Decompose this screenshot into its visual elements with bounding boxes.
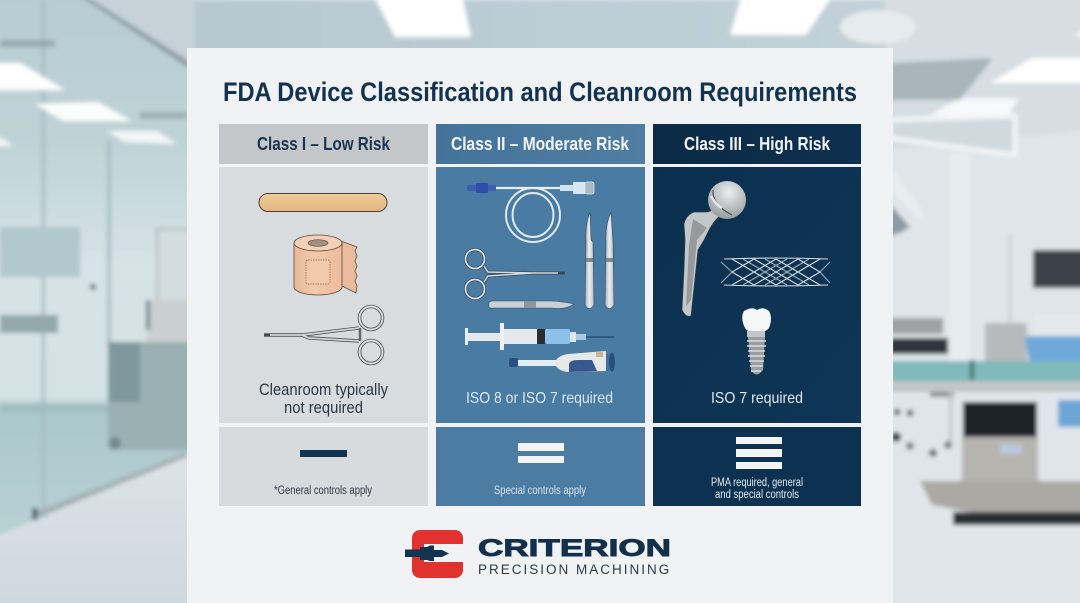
text: cleanroom status [259, 381, 389, 417]
icon: dental implant [742, 308, 771, 374]
text: cleanroom requirement: ISO 8 or ISO 7 required [466, 390, 613, 407]
glass wall [0, 0, 195, 540]
floor left [0, 454, 195, 603]
icon: syringe [465, 323, 614, 350]
icon: IV tubing [467, 182, 594, 242]
text: PMA note [711, 477, 803, 501]
panel: Class II devices [436, 167, 645, 423]
icon: tongue depressor [259, 194, 387, 212]
panel: Class III devices [653, 167, 861, 423]
header: Class II: Class II – Moderate Risk [451, 133, 630, 154]
title: FDA Device Classification and Cleanroom Requirements [223, 77, 857, 107]
column: Class III [653, 124, 861, 506]
surgical lamp [890, 204, 910, 236]
light frame [890, 116, 1015, 155]
right wall [890, 150, 1080, 365]
header: Class III [653, 124, 861, 164]
header: Class I: Class I – Low Risk [257, 133, 391, 154]
text: PMA note: PMA required, general [711, 477, 803, 489]
header: Class I [219, 124, 428, 164]
logo: Criterion Precision Machining: PRECISION MACHINING [478, 562, 671, 577]
icon: double bar [518, 443, 564, 463]
text: cleanroom status: Cleanroom typically [259, 381, 389, 399]
back room window and desk [157, 229, 192, 304]
icon: bandage tape roll [294, 235, 357, 295]
icon: stent [721, 258, 830, 286]
text: cleanroom requirement: ISO 7 required [711, 390, 803, 407]
footer: special controls [436, 427, 645, 506]
footer: special controls: Special controls apply [494, 485, 586, 497]
footer: general controls [219, 427, 428, 506]
wordmark: CRITERION [478, 535, 671, 562]
panel: white card [187, 48, 893, 603]
header: Class II [436, 124, 645, 164]
operating table [890, 361, 1080, 381]
icon: scalpels [489, 212, 614, 308]
icon: red C with spindle [405, 530, 468, 578]
footer: general controls: *General controls apply [274, 485, 372, 497]
cabinet at left [108, 342, 192, 450]
ceiling vent and lamp dome [890, 58, 993, 100]
carts and blue drape [985, 323, 1027, 361]
ceiling [0, 0, 1080, 70]
column: Class II [436, 124, 645, 506]
icon: hemostat forceps [264, 306, 382, 364]
icon: hip implant [682, 181, 746, 316]
logo: Criterion Precision Machining [405, 530, 671, 578]
text: PMA note: and special controls [715, 489, 799, 501]
footer: PMA controls [653, 427, 861, 506]
monitor [1033, 250, 1080, 288]
column: Class I [219, 124, 428, 506]
icon: forceps [466, 250, 565, 298]
text: cleanroom status: not required [284, 399, 363, 417]
ceiling lights [0, 63, 65, 90]
icon: single bar [300, 450, 347, 457]
header: Class III: Class III – High Risk [684, 133, 831, 154]
icon: auto-injector [509, 351, 615, 372]
panel: Class I devices [219, 167, 428, 423]
icon: triple bar [736, 437, 782, 469]
